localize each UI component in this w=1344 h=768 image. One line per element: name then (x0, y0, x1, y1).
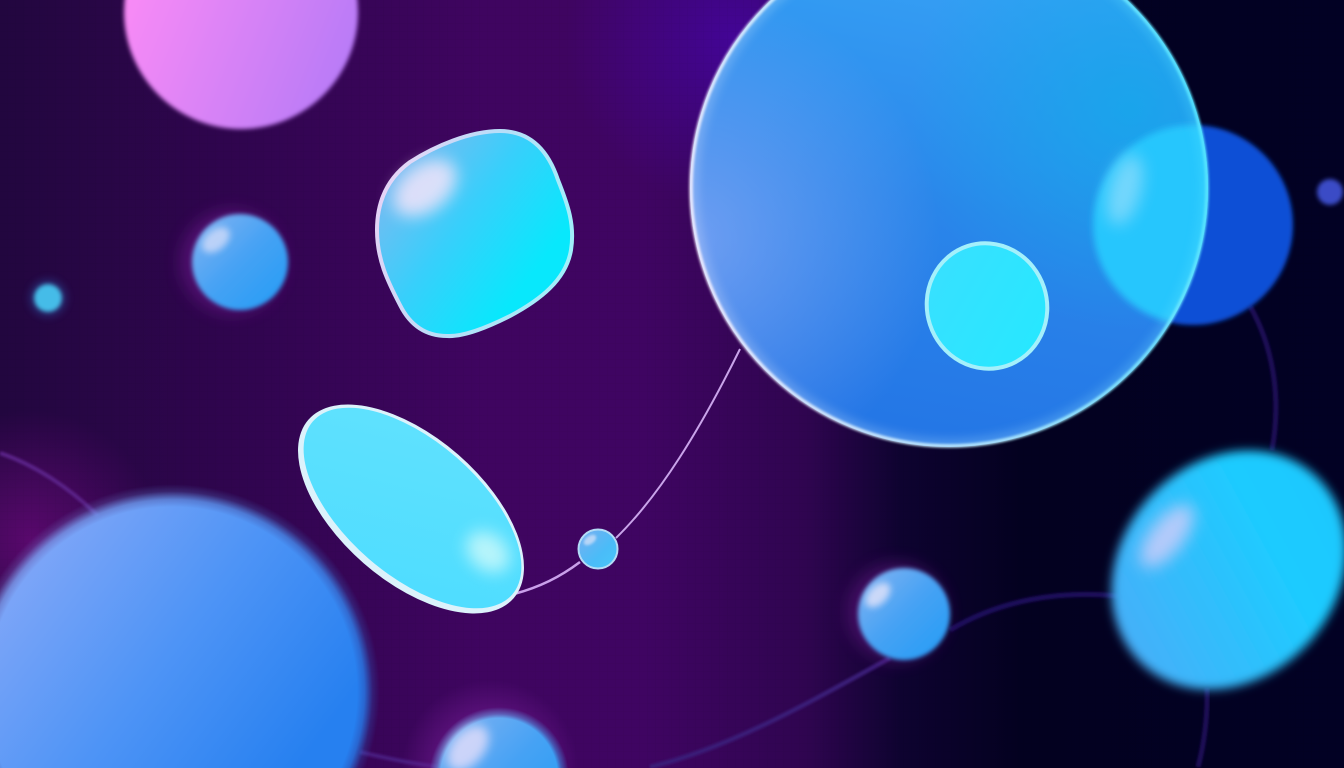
blue sphere, upper left (180, 210, 288, 314)
small cyan dot, left (28, 278, 68, 318)
small blue dot, top right (1317, 179, 1343, 205)
large translucent bubble (687, 0, 1210, 450)
oval cell (261, 365, 561, 653)
inner cell (910, 228, 1064, 384)
lower connecting line (514, 562, 580, 594)
squircle cell (377, 131, 572, 336)
blue sphere, lower right (847, 562, 950, 662)
small node on line (578, 530, 618, 568)
blurred oval, right (1063, 403, 1344, 737)
connecting line to large bubble (616, 349, 740, 538)
pink sphere (124, 0, 358, 129)
large blurred sphere, lower left (0, 470, 385, 768)
dark blue sphere behind large bubble (1093, 125, 1293, 325)
connector lines: background network (0, 306, 1276, 767)
overlapping cyan lobe (690, 0, 1208, 447)
bottom sphere (412, 690, 568, 768)
